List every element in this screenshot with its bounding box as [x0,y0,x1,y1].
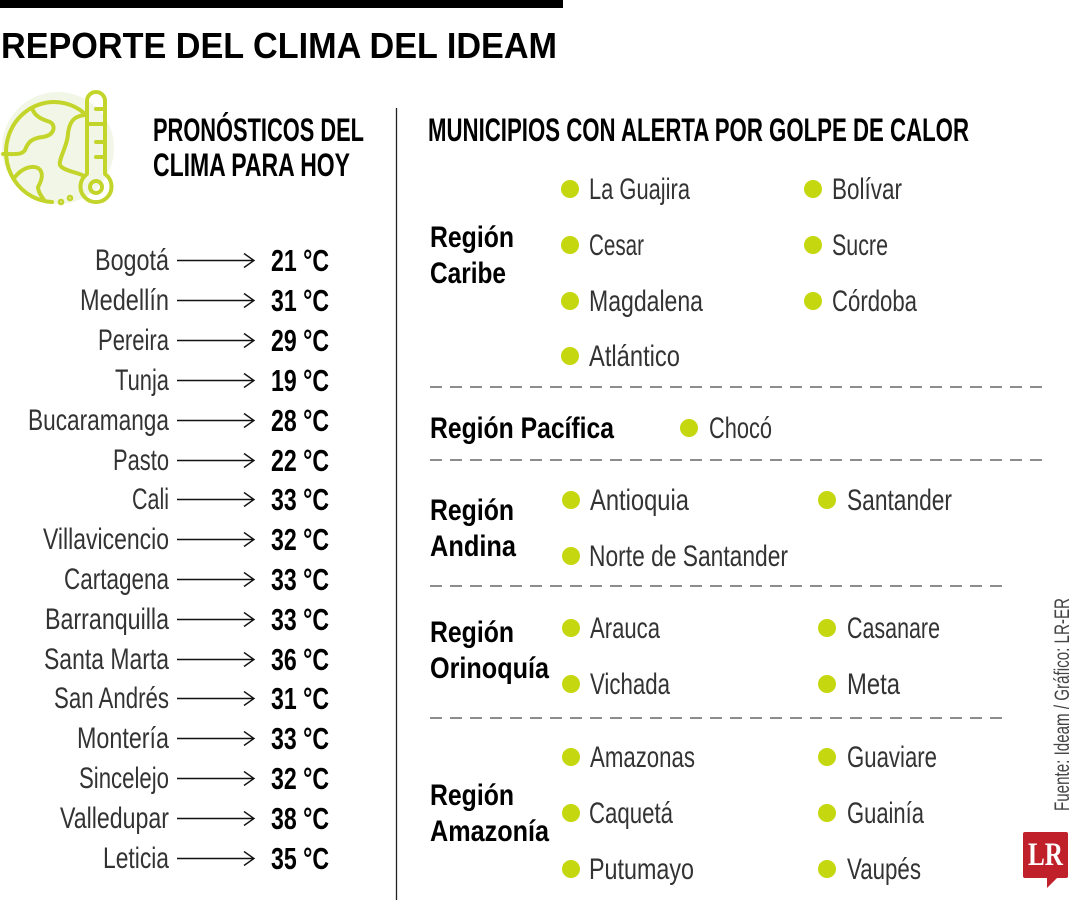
row: Cartagena [64,562,329,597]
row: Barranquilla: 33 °C [271,602,329,637]
row: Leticia [103,841,329,876]
row: Medellín [80,283,329,318]
row: Sincelejo: Sincelejo [79,762,169,795]
panel: Región Amazonía: Guaviare [847,741,937,774]
panel: Región Caribe: Magdalena [589,285,703,318]
panel: Región Orinoquía: Meta [847,668,900,701]
row: Cali [132,482,329,517]
row: Pereira: 29 °C [271,323,329,358]
row: Pereira [98,323,329,358]
panel: Región Amazonía: Caquetá [589,797,673,830]
panel: Región Andina [430,484,952,573]
panel: Región Orinoquía: Casanare [847,612,940,645]
panel: Región Andina: Santander [847,484,952,517]
heading: pronosticos [153,112,364,183]
row: Bucaramanga [28,403,329,438]
panel: Región Amazonía: Amazonía [430,815,549,848]
row: Cali: Cali [132,483,169,516]
row: Bucaramanga: 28 °C [271,403,329,438]
panel: Región Pacífica [430,412,772,445]
panel: Región Andina: Andina [430,530,516,563]
row: Montería [77,721,329,756]
row: Valledupar: 38 °C [271,801,329,836]
panel: Región Pacífica: Chocó [709,412,772,445]
panel: Región Amazonía: Putumayo [589,853,694,886]
row: Villavicencio: 32 °C [271,522,329,557]
icon: LR logo [1023,832,1068,888]
panel: Región Amazonía: Amazonas [590,741,695,774]
panel: Región Andina: Región [430,494,514,527]
row: Barranquilla: Barranquilla [45,603,169,636]
top bar [0,0,563,8]
row: Tunja: 19 °C [271,363,329,398]
heading: pronosticos: PRONÓSTICOS DEL [153,112,364,148]
panel: Región Orinoquía [430,612,940,701]
panel: city forecast list [28,243,329,876]
row: Medellín: Medellín [80,284,169,317]
panel: Región Caribe: Cesar [589,229,644,262]
row: Villavicencio: Villavicencio [43,523,169,556]
row: Santa Marta: 36 °C [271,642,329,677]
row: San Andrés [54,681,329,716]
panel: Región Caribe: Bolívar [832,173,902,206]
panel: Región Caribe: Córdoba [832,285,917,318]
row: Bogotá: Bogotá [95,244,169,277]
row: Montería: Montería [77,722,169,755]
row: Santa Marta: Santa Marta [44,643,169,676]
row: Cali: 33 °C [271,482,329,517]
title: REPORTE DEL CLIMA DEL IDEAM [1,25,557,66]
source credit: Fuente: Ideam / Gráfico: LR-ER [1051,598,1074,811]
row: Pasto: 22 °C [271,443,329,478]
panel: Región Amazonía: Vaupés [847,853,921,886]
panel: Región Caribe: Sucre [832,229,888,262]
panel: Región Orinoquía: Región [430,616,514,649]
heading: pronosticos: CLIMA PARA HOY [153,147,350,183]
row: Medellín: 31 °C [271,283,329,318]
panel: Región Caribe: Región [430,221,514,254]
icon: globe with thermometer [2,92,114,204]
row: San Andrés: 31 °C [271,681,329,716]
row: Bogotá [95,243,329,278]
row: Montería: 33 °C [271,721,329,756]
panel: Región Amazonía: Guainía [847,797,924,830]
row: Barranquilla [45,602,329,637]
panel: Región Pacífica: Región Pacífica [430,412,614,445]
icon: LR logo: LR [1028,837,1064,873]
row: Cartagena: Cartagena [64,563,169,596]
row: Villavicencio [43,522,329,557]
panel: Región Amazonía: Región [430,779,514,812]
row: Cartagena: 33 °C [271,562,329,597]
row: Tunja: Tunja [115,364,169,397]
panel: Región Orinoquía: Arauca [590,612,660,645]
row: Sincelejo [79,761,329,796]
row: Sincelejo: 32 °C [271,761,329,796]
row: Tunja [115,363,329,398]
panel: Región Orinoquía: Orinoquía [430,652,549,685]
row: Santa Marta [44,642,329,677]
row: Leticia: Leticia [103,842,169,875]
row: Valledupar: Valledupar [60,802,169,835]
panel: Región Andina: Norte de Santander [589,540,788,573]
row: Bucaramanga: Bucaramanga [28,404,169,437]
row: Valledupar [60,801,329,836]
panel: Región Caribe: Atlántico [589,340,680,373]
row: San Andrés: San Andrés [54,682,169,715]
row: Pasto: Pasto [113,444,169,477]
panel: Región Amazonía [430,741,937,886]
panel: Región Caribe: Caribe [430,257,506,290]
panel: Región Caribe: La Guajira [589,173,690,206]
row: Pasto [113,443,329,478]
row: Leticia: 35 °C [271,841,329,876]
panel: Región Andina: Antioquia [590,484,689,517]
panel: Región Orinoquía: Vichada [590,668,670,701]
row: Pereira: Pereira [98,324,169,357]
row: Bogotá: 21 °C [271,243,329,278]
panel: Región Caribe [430,173,917,373]
